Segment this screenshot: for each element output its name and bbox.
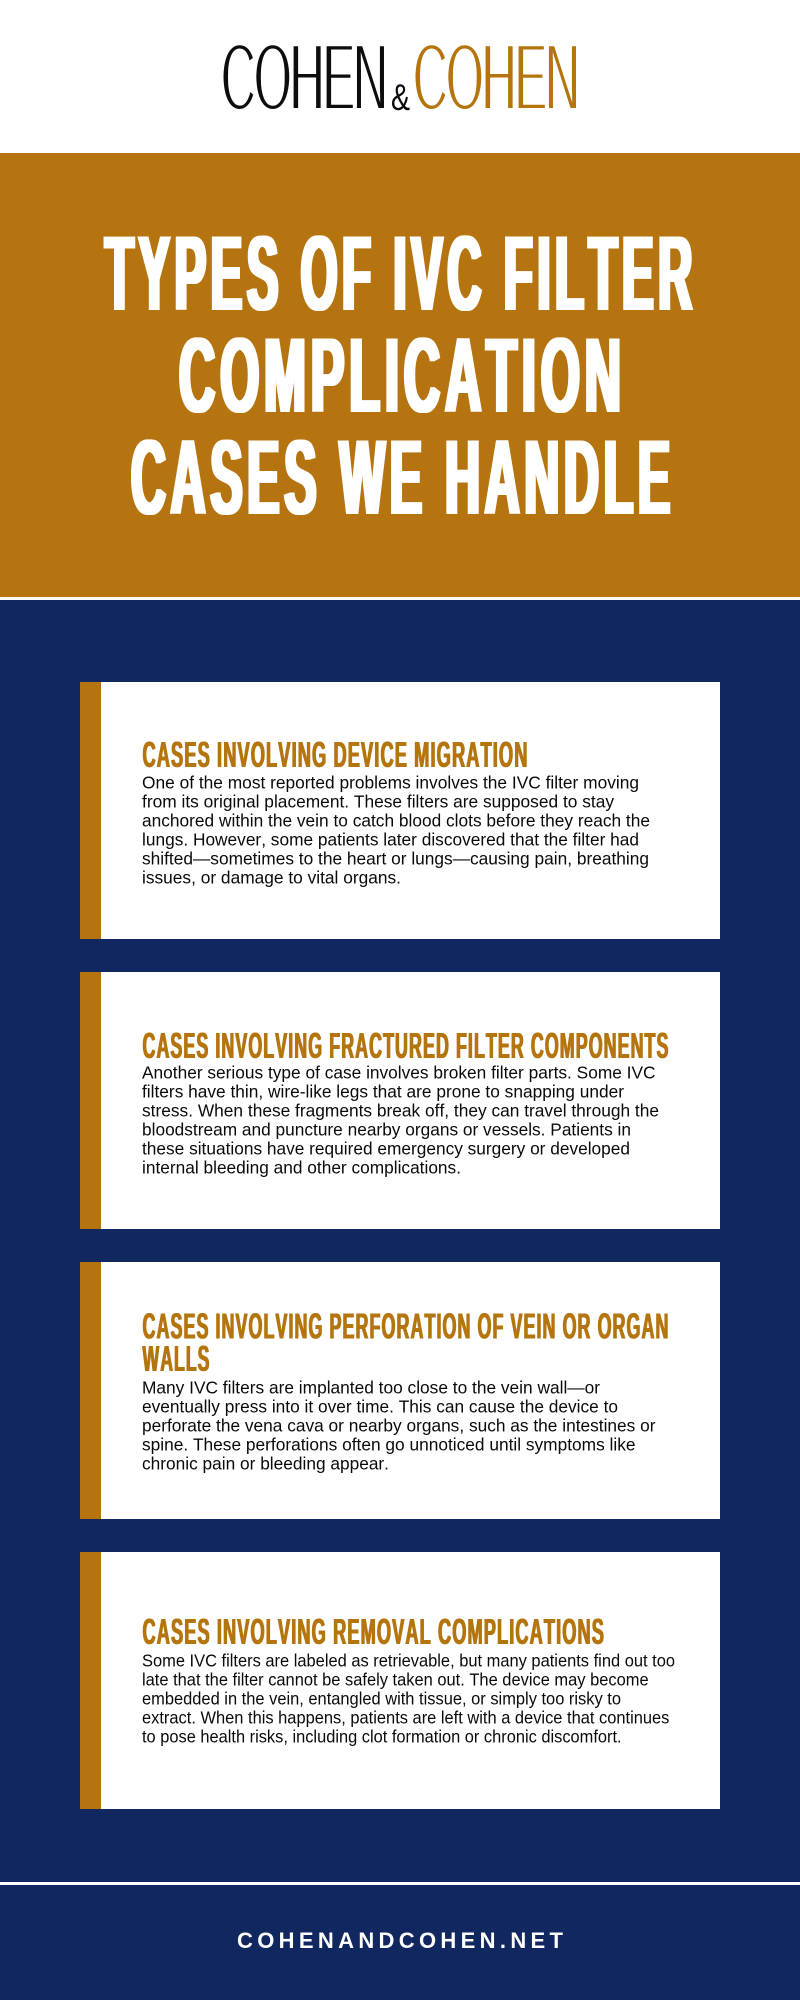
text block: fractured filter components: stress. When these fragments break off, they can travel through the [142, 1100, 659, 1120]
text block: perforation: chronic pain or bleeding appear. [142, 1453, 389, 1473]
text block: fractured filter components: internal bleeding and other complications. [142, 1157, 461, 1177]
title [105, 213, 697, 537]
text block: removal complications: embedded in the vein, entangled with tissue, or simply too risky to [142, 1688, 621, 1708]
panel: device migration [80, 682, 720, 939]
text block: removal complications: to pose health risks, including clot formation or chronic discomfort. [142, 1726, 622, 1746]
text block: device migration: One of the most reported problems involves the IVC filter moving [142, 772, 639, 792]
panel: perforation of vein or organ walls [80, 1262, 720, 1519]
footer website: COHENANDCOHEN.NET [237, 1928, 564, 1953]
text block: device migration: lungs. However, some patients later discovered that the filter had [142, 829, 639, 849]
heading: perforation [142, 1305, 669, 1379]
heading: perforation: WALLS [142, 1338, 210, 1379]
title band [0, 153, 800, 600]
logo: Cohen & Cohen: & [391, 77, 410, 118]
panel: removal complications [80, 1552, 720, 1809]
text block: perforation: Many IVC filters are implanted too close to the vein wall—or [142, 1377, 600, 1397]
text block: fractured filter components: filters have thin, wire-like legs that are prone to snapping under [142, 1081, 624, 1101]
text block: device migration: shifted—sometimes to the heart or lungs—causing pain, breathing [142, 848, 649, 868]
text block: fractured filter components: bloodstream and puncture nearby organs or vessels. Patients in [142, 1119, 631, 1139]
panel: fractured filter components [80, 972, 720, 1229]
text block: device migration: from its original placement. These filters are supposed to stay [142, 791, 614, 811]
text block: perforation [142, 1377, 656, 1473]
text block: perforation: perforate the vena cava or nearby organs, such as the intestines or [142, 1415, 656, 1435]
text block: removal complications: Some IVC filters are labeled as retrievable, but many patients find out too [142, 1650, 675, 1670]
text block: device migration [142, 772, 650, 887]
text block: perforation: spine. These perforations often go unnoticed until symptoms like [142, 1434, 636, 1454]
text block: device migration: anchored within the vein to catch blood clots before they reach the [142, 810, 650, 830]
text block: fractured filter components: these situations have required emergency surgery or developed [142, 1138, 630, 1158]
text block: perforation: eventually press into it over time. This can cause the device to [142, 1396, 618, 1416]
logo: Cohen & Cohen: COHEN [221, 24, 386, 131]
text block: removal complications: late that the filter cannot be safely taken out. The device may become [142, 1669, 649, 1689]
footer [0, 1882, 800, 1953]
logo: Cohen & Cohen: COHEN [413, 24, 578, 131]
text block: device migration: issues, or damage to vital organs. [142, 867, 401, 887]
header band: logo [0, 0, 800, 153]
text block: removal complications: extract. When this happens, patients are left with a device that continues [142, 1707, 670, 1727]
text block: fractured filter components [142, 1062, 659, 1177]
text block: fractured filter components: Another serious type of case involves broken filter parts. Some IVC [142, 1062, 656, 1082]
text block: removal complications [142, 1650, 675, 1746]
